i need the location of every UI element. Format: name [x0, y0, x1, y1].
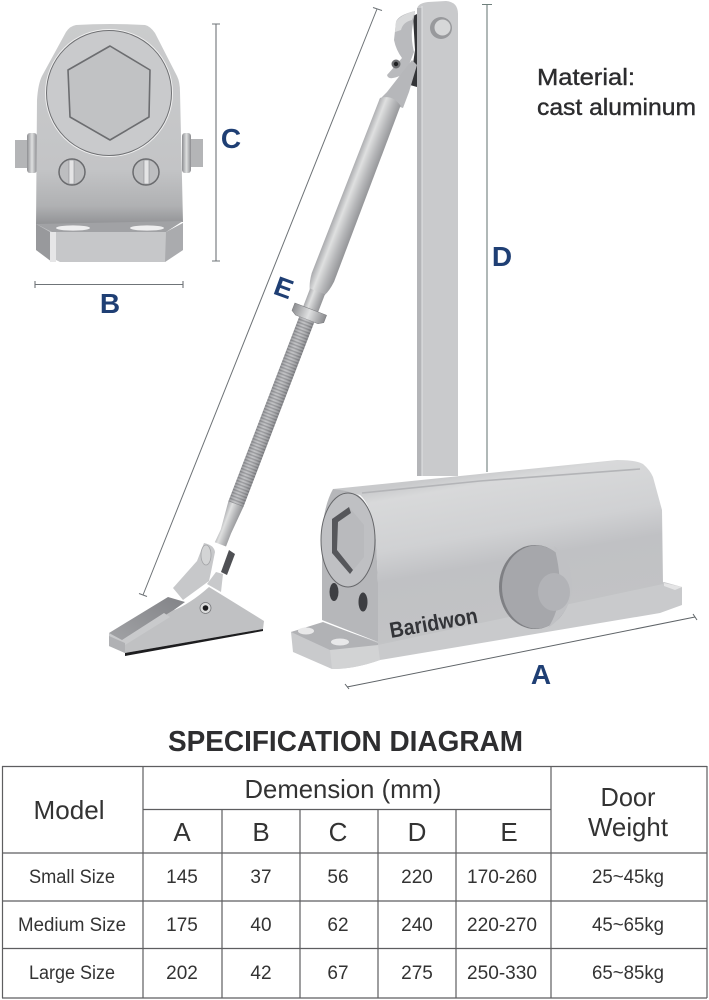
table header labels: Model	[34, 795, 104, 825]
door shoe bracket	[109, 587, 264, 656]
end plate body	[36, 24, 183, 226]
vertical arm	[417, 1, 458, 476]
elbow joint	[387, 11, 417, 87]
icon: end face hole left	[330, 583, 338, 601]
main housing	[333, 460, 663, 645]
row: large size: 65~85kg	[592, 963, 664, 984]
dimension line D	[482, 4, 492, 472]
row: small size: 25~45kg	[592, 867, 664, 888]
icon: right side nut	[182, 133, 203, 173]
row: small size: 220	[401, 867, 433, 888]
row: medium size: Medium Size	[18, 915, 126, 936]
table header labels: C	[329, 817, 347, 847]
row: large size: 275	[401, 963, 433, 984]
material note: cast aluminum	[537, 94, 696, 120]
row: small size	[29, 867, 664, 888]
lower fork joint	[173, 543, 235, 600]
row: medium size: 62	[327, 915, 349, 936]
dimension line B	[35, 281, 183, 288]
dimension line A	[345, 614, 697, 689]
table header labels: E	[500, 817, 518, 847]
lock nut	[291, 303, 327, 325]
row: small size: 145	[166, 867, 198, 888]
icon: left side nut	[15, 133, 37, 173]
end circular ring	[321, 493, 375, 587]
tube collar	[303, 289, 325, 313]
row: medium size: 175	[166, 915, 198, 936]
circular socket ring	[45, 29, 173, 157]
specification table	[2, 766, 707, 998]
row: large size: 67	[327, 963, 349, 984]
row: medium size	[18, 915, 664, 936]
row: large size: Large Size	[29, 963, 115, 984]
row: large size: 202	[166, 963, 198, 984]
brand label: Baridwon	[388, 603, 480, 643]
row: small size: 170-260	[467, 867, 537, 888]
mounting foot	[36, 221, 183, 262]
row: medium size: 45~65kg	[592, 915, 664, 936]
right slotted screw	[133, 159, 159, 185]
table header labels: Demension (mm)	[244, 774, 442, 804]
tube head link	[379, 60, 417, 108]
closer body	[291, 460, 682, 669]
base plate	[291, 582, 682, 669]
dimension label E: E	[270, 271, 297, 305]
left slotted screw	[59, 159, 85, 185]
telescopic rod assembly	[205, 60, 417, 550]
row: small size: 37	[250, 867, 272, 888]
small end view of door closer	[15, 24, 203, 262]
dimension line E	[139, 8, 382, 596]
row: medium size: 240	[401, 915, 433, 936]
material note: Material:	[537, 64, 635, 90]
threaded rod	[228, 317, 314, 507]
row: large size: 42	[250, 963, 272, 984]
table header labels	[34, 774, 669, 847]
icon: end face hole right	[358, 592, 368, 612]
title: SPECIFICATION DIAGRAM	[168, 726, 523, 758]
smooth rod end	[213, 501, 243, 547]
upper telescopic tube	[306, 94, 403, 297]
table header labels: D	[408, 817, 426, 847]
row: large size	[29, 963, 664, 984]
dimension line C	[212, 24, 220, 261]
adjustment knob	[499, 545, 572, 629]
dimension label C: C	[221, 123, 241, 154]
hexagonal socket	[332, 507, 364, 574]
row: large size: 250-330	[467, 963, 537, 984]
end face	[322, 489, 378, 642]
table grid	[2, 766, 707, 998]
table header labels: B	[252, 817, 270, 847]
row: small size: 56	[327, 867, 349, 888]
table header labels: Door	[600, 782, 656, 812]
icon: arm pivot pin	[430, 17, 452, 39]
row: medium size: 220-270	[467, 915, 537, 936]
row: medium size: 40	[250, 915, 272, 936]
row: small size: Small Size	[29, 867, 115, 888]
dimension label D: D	[492, 241, 512, 272]
dimension label B: B	[100, 288, 120, 319]
table header labels: Weight	[588, 812, 669, 842]
hexagon socket	[68, 46, 150, 140]
table header labels: A	[173, 817, 191, 847]
material note	[537, 64, 696, 120]
dimension label A: A	[531, 659, 551, 690]
icon: shoe screw hole	[200, 602, 211, 614]
